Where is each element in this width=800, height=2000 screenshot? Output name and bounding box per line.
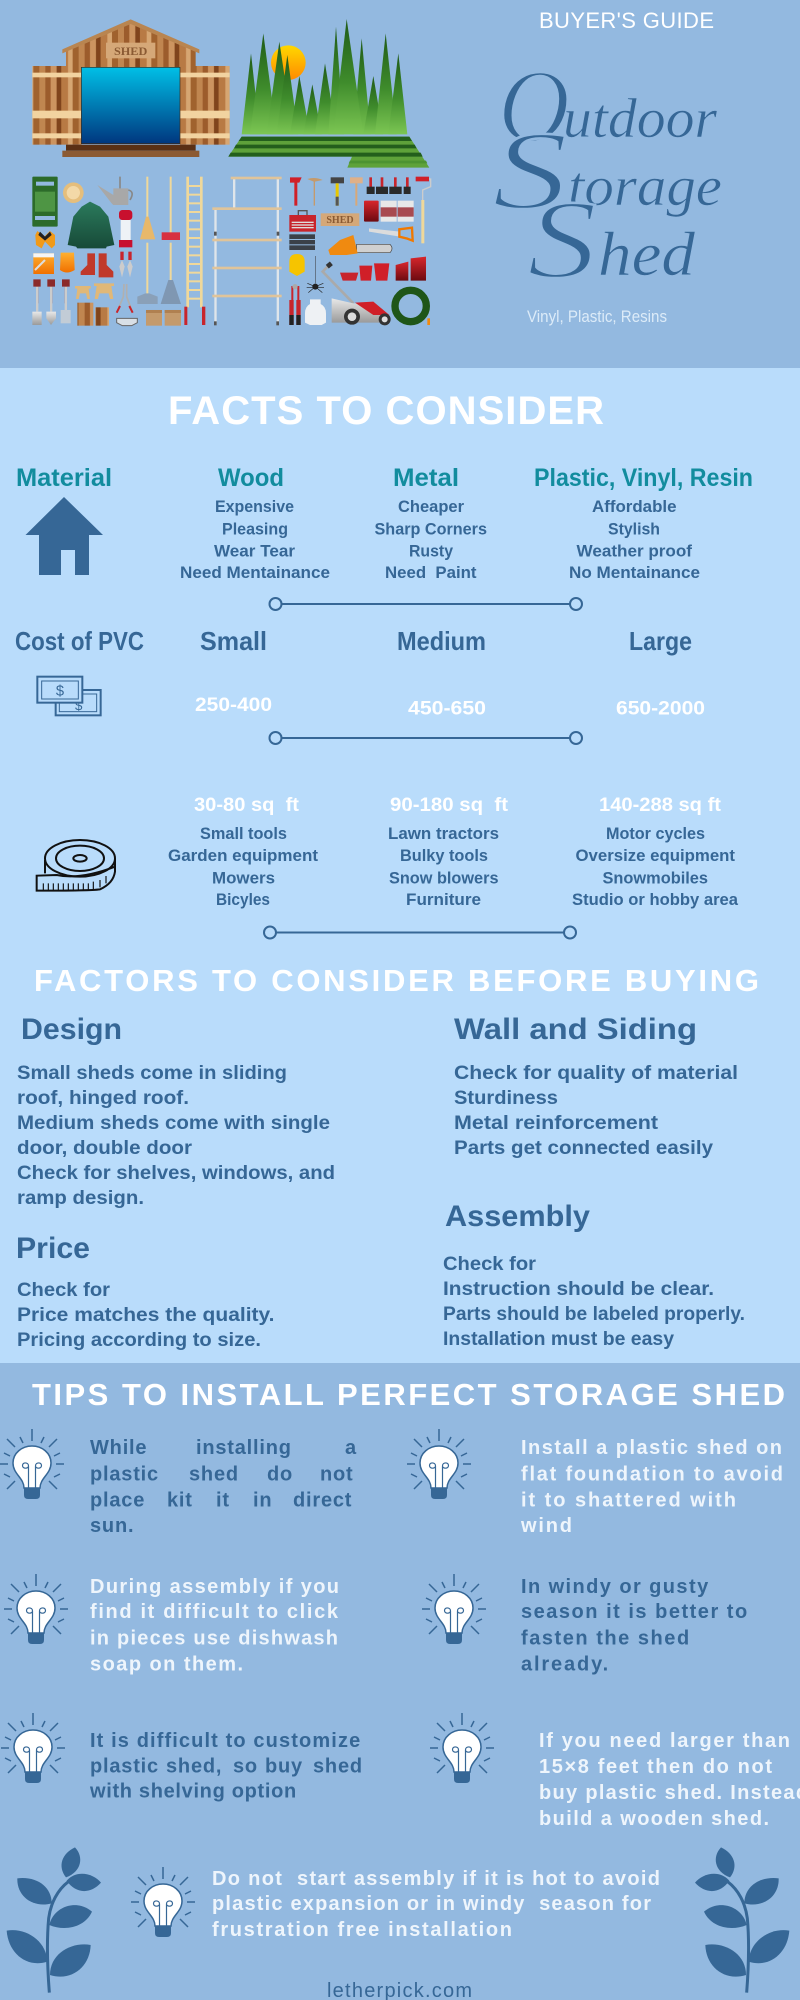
row: cost of PVC <box>15 626 705 720</box>
column headings <box>15 626 692 656</box>
icon: light bulb <box>1 1713 65 1783</box>
size labels: 90-180 sq ft <box>390 795 509 816</box>
list: large shed uses: Snowmobiles <box>602 868 708 888</box>
block: wall and siding: Check for quality of material <box>454 1062 738 1084</box>
tip text: it <box>216 1490 230 1512</box>
tip text: 15×8 feet then do not <box>539 1756 772 1778</box>
tip text: so <box>233 1756 258 1778</box>
icon: light bulb <box>407 1429 471 1499</box>
icon: light bulb <box>422 1574 486 1644</box>
list: wood: Wear Tear <box>214 542 295 560</box>
heading: factors to consider before buying: FACTORS TO CONSIDER BEFORE BUYING <box>34 963 759 998</box>
price values: 450-650 <box>408 698 486 720</box>
list: plastic: Affordable <box>592 497 676 516</box>
tip text: Do not start assembly if it is hot to avoid <box>212 1868 660 1890</box>
tip text: direct <box>293 1490 352 1512</box>
illustration: garden tools right group <box>289 177 431 325</box>
block: design: Design <box>21 1013 122 1046</box>
illustration: shelving unit <box>212 177 282 325</box>
tip text: do <box>267 1464 293 1486</box>
tip text: in pieces use dishwash <box>90 1628 338 1650</box>
column headings: Material <box>16 464 112 492</box>
tip text: fasten the shed <box>521 1628 690 1650</box>
tip text: build a wooden shed. <box>539 1808 769 1830</box>
tip 6 <box>430 1713 800 1830</box>
list: wood: Expensive <box>215 497 294 516</box>
tip text: frustration free installation <box>212 1919 512 1941</box>
block: design: Small sheds come in sliding <box>17 1062 287 1084</box>
tip text: During assembly if you <box>90 1576 339 1598</box>
column headings: Plastic, Vinyl, Resin <box>534 464 753 492</box>
tip text: plastic <box>90 1464 159 1486</box>
tip 4 <box>422 1574 748 1676</box>
tip text: with shelving option <box>89 1780 297 1802</box>
tip text: already. <box>521 1654 609 1676</box>
list: medium shed uses: Snow blowers <box>389 868 498 888</box>
block: assembly: Installation must be easy <box>443 1328 674 1350</box>
icon: light bulb <box>430 1713 494 1783</box>
list: medium shed uses: Lawn tractors <box>388 824 499 843</box>
block: assembly: Assembly <box>445 1200 590 1233</box>
tip text: buy <box>265 1756 303 1778</box>
panel: installation tips <box>0 1363 800 2000</box>
list: large shed uses: Studio or hobby area <box>572 890 739 909</box>
list: small shed uses <box>168 824 318 909</box>
list: wood: Need Mentainance <box>180 563 330 582</box>
title: outdoor storage shed: torage <box>568 156 722 218</box>
tip text: sun. <box>90 1515 134 1537</box>
icon: plant right <box>695 1847 789 1993</box>
tip text: shed <box>313 1756 363 1778</box>
tip 3 <box>4 1574 339 1676</box>
tip 5 <box>1 1713 363 1802</box>
icon: light bulb <box>4 1574 68 1644</box>
list: metal <box>374 497 487 582</box>
illustration: forest and sun <box>228 19 429 168</box>
list: wood <box>180 497 330 582</box>
list: large shed uses: Oversize equipment <box>576 846 735 865</box>
block: design: Medium sheds come with single <box>17 1112 330 1134</box>
tip text: it to shattered with <box>521 1490 736 1512</box>
tip text: installing <box>196 1437 292 1459</box>
icon: light bulb <box>131 1867 195 1937</box>
tip text: wind <box>520 1515 572 1537</box>
block: price: Check for <box>17 1279 110 1301</box>
panel: facts and factors <box>0 368 800 1363</box>
icon: banknotes <box>37 677 101 715</box>
title: outdoor storage shed: O <box>498 49 570 164</box>
tip 2 <box>407 1429 783 1537</box>
list: small shed uses: Garden equipment <box>168 846 318 865</box>
list: plastic: Weather proof <box>576 542 692 560</box>
tip text: It is difficult to customize <box>90 1730 361 1752</box>
tip text: kit <box>167 1490 193 1512</box>
block: assembly <box>443 1200 745 1350</box>
tip text: In windy or gusty <box>521 1576 709 1598</box>
block: wall and siding: Sturdiness <box>454 1087 558 1109</box>
icon: house <box>26 497 103 575</box>
tip text <box>539 1730 800 1830</box>
price values: 650-2000 <box>616 698 705 720</box>
tip text: plastic <box>90 1756 159 1778</box>
list: medium shed uses: Bulky tools <box>400 846 488 865</box>
list: large shed uses: Motor cycles <box>606 824 705 843</box>
subtitle: Vinyl, Plastic, Resins <box>527 307 667 326</box>
price values <box>195 695 705 720</box>
icon: light bulb <box>0 1429 64 1499</box>
block: price <box>16 1232 274 1351</box>
column headings: Medium <box>397 626 486 656</box>
block: design <box>17 1013 335 1209</box>
heading: facts to consider: FACTS TO CONSIDER <box>168 389 604 433</box>
list: metal: Rusty <box>409 542 454 560</box>
tip text <box>520 1437 783 1537</box>
tip text: find it difficult to click <box>90 1601 339 1623</box>
row: material comparison <box>16 464 753 582</box>
panel: header <box>0 0 800 368</box>
tip text: in <box>253 1490 272 1512</box>
list: plastic: Stylish <box>608 520 660 538</box>
block: assembly: Check for <box>443 1253 536 1275</box>
title: outdoor storage shed <box>492 49 722 302</box>
tip text: soap on them. <box>90 1654 243 1676</box>
list: medium shed uses <box>388 824 499 909</box>
tip text: shed, <box>166 1756 222 1778</box>
list: small shed uses: Bicyles <box>216 890 270 909</box>
block: assembly: Instruction should be clear. <box>443 1278 714 1300</box>
column headings: Large <box>629 626 692 656</box>
tip text: If you need larger than <box>539 1730 790 1752</box>
tip text: season it is better to <box>521 1601 748 1623</box>
block: design: ramp design. <box>17 1187 144 1209</box>
block: price: Pricing according to size. <box>17 1329 261 1351</box>
tip text: Install a plastic shed on <box>521 1437 782 1459</box>
title: outdoor storage shed: S <box>527 178 597 302</box>
list: plastic: No Mentainance <box>569 563 700 582</box>
tip text: a <box>345 1437 357 1459</box>
row: shed size <box>37 795 739 909</box>
block: wall and siding: Parts get connected easily <box>454 1137 713 1159</box>
size labels: 30-80 sq ft <box>194 795 300 816</box>
list: metal: Need Paint <box>385 563 477 582</box>
column headings: Wood <box>218 464 284 492</box>
column headings: Metal <box>393 464 459 492</box>
icon: banknotes: $ <box>75 698 83 713</box>
tip text: shed <box>189 1464 239 1486</box>
list: small shed uses: Mowers <box>212 868 275 888</box>
illustration: wooden shed: SHED <box>114 44 148 58</box>
list: plastic <box>569 497 700 582</box>
title: outdoor storage shed: S <box>492 109 568 233</box>
icon: banknotes: $ <box>56 684 64 700</box>
block: design: roof, hinged roof. <box>17 1087 189 1109</box>
block: price: Price <box>16 1232 90 1265</box>
illustration: garden tools left group <box>32 177 205 326</box>
list: small shed uses: Small tools <box>200 824 287 843</box>
tip text <box>89 1730 363 1802</box>
illustration: garden tools right group: SHED <box>326 215 354 226</box>
tip text <box>521 1576 748 1676</box>
price values: 250-400 <box>195 695 272 716</box>
size labels: 140-288 sq ft <box>599 795 722 816</box>
tip text: place <box>90 1490 145 1512</box>
tip text <box>212 1868 660 1941</box>
list: medium shed uses: Furniture <box>406 890 481 909</box>
column headings: Cost of PVC <box>15 626 144 656</box>
block: design: door, double door <box>17 1137 192 1159</box>
block: wall and siding: Metal reinforcement <box>454 1112 659 1134</box>
tip 7 <box>131 1867 660 1941</box>
tip text <box>90 1576 339 1676</box>
list: metal: Sharp Corners <box>374 520 487 538</box>
tip 1 <box>0 1429 357 1537</box>
size labels <box>194 795 722 816</box>
tip text: While <box>90 1437 147 1459</box>
label: buyer's guide: BUYER'S GUIDE <box>539 8 714 33</box>
tip text: plastic expansion or in windy season for <box>212 1893 651 1915</box>
column headings <box>16 464 753 492</box>
list: metal: Cheaper <box>398 497 464 516</box>
list: wood: Pleasing <box>222 520 288 538</box>
icon: tape measure <box>37 840 115 891</box>
block: design: Check for shelves, windows, and <box>17 1162 335 1184</box>
title: outdoor storage shed: hed <box>598 221 696 289</box>
block: wall and siding <box>454 1013 738 1159</box>
illustration: wooden shed <box>32 19 230 157</box>
block: price: Price matches the quality. <box>17 1304 274 1326</box>
column headings: Small <box>200 626 267 656</box>
heading: tips to install perfect storage shed: TIPS TO INSTALL PERFECT STORAGE SHED <box>32 1377 785 1412</box>
tip text: flat foundation to avoid <box>521 1464 783 1486</box>
title: outdoor storage shed: utdoor <box>563 88 717 150</box>
illustration: shed and tools <box>32 19 431 326</box>
tip text: not <box>320 1464 354 1486</box>
block: wall and siding: Wall and Siding <box>454 1013 697 1046</box>
icon: plant left <box>7 1847 101 1993</box>
block: assembly: Parts should be labeled properly. <box>443 1303 745 1325</box>
list: large shed uses <box>572 824 739 909</box>
